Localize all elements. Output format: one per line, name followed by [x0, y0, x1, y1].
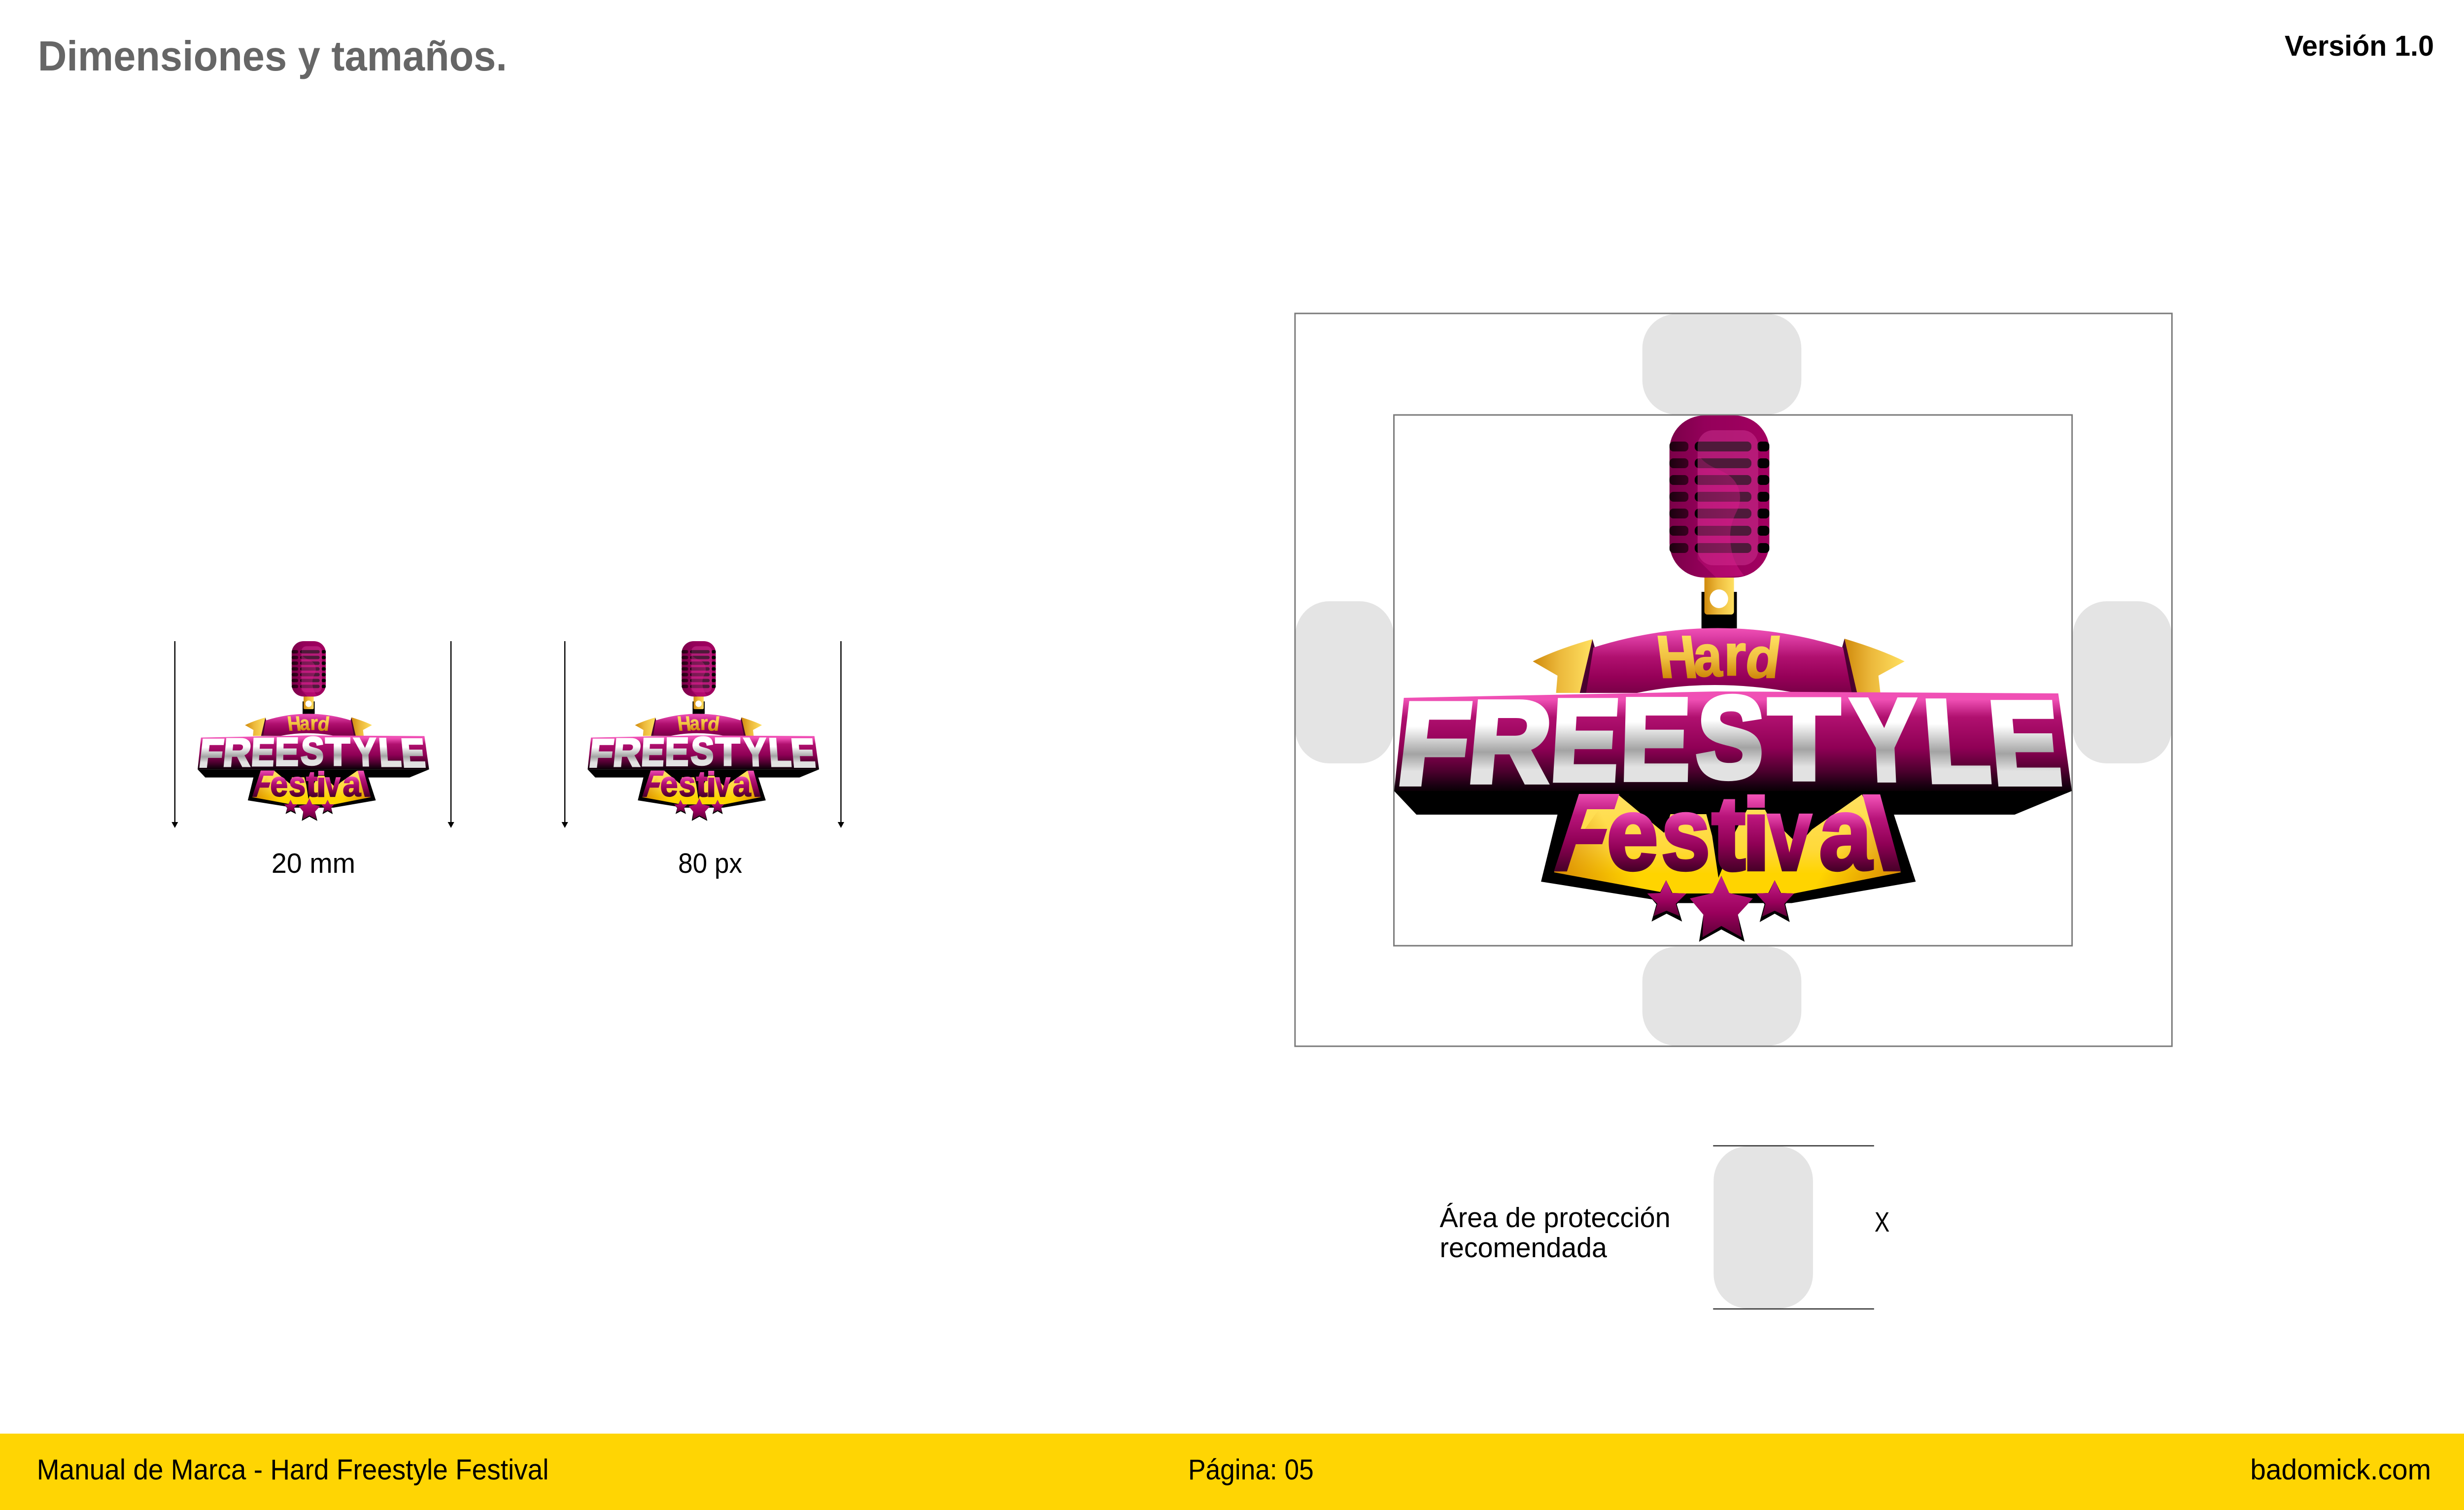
wordmark Festival: v — [1768, 776, 1812, 892]
small logo: E — [640, 730, 666, 774]
small logo: e — [660, 764, 678, 804]
panel: protection area diagram — [1295, 313, 2172, 1046]
footer bar — [0, 1434, 2464, 1510]
small logo: Y — [353, 730, 377, 774]
small logo: e — [270, 764, 288, 804]
small logo: a — [689, 712, 700, 735]
small logo: d — [707, 714, 721, 735]
wordmark FREESTYLE: Y — [1849, 676, 1920, 804]
small logo: R — [611, 730, 643, 775]
panel: small logo 80 px — [562, 641, 844, 879]
small logo: v — [325, 764, 341, 804]
wordmark FREESTYLE: E — [1547, 676, 1623, 804]
small logo: E — [664, 730, 689, 774]
legend text: Área de protección — [1440, 1202, 1671, 1233]
wordmark FREESTYLE: L — [1919, 676, 1994, 806]
small logo: s — [289, 765, 306, 804]
protection pad right — [2073, 601, 2172, 763]
small logo: r — [310, 712, 318, 734]
small logo: d — [316, 714, 331, 735]
yellow Festival banner — [1554, 794, 1901, 893]
legend top rule — [1713, 1145, 1874, 1146]
legend: recommended protection area — [1440, 1146, 1889, 1309]
right dimension arrow — [838, 641, 844, 828]
wordmark Festival: F — [1543, 773, 1628, 893]
wordmark Festival: l — [1852, 778, 1913, 892]
wordmark FREESTYLE: E — [1984, 678, 2066, 809]
wordmark FREESTYLE: F — [1392, 679, 1476, 808]
size label 20 mm: 20 mm — [272, 848, 355, 879]
small logo: H — [286, 713, 303, 735]
legend X label: X — [1875, 1206, 1889, 1237]
protection pad top — [1643, 314, 1801, 414]
footer manual title: Manual de Marca - Hard Freestyle Festival — [37, 1454, 549, 1486]
small logo: r — [700, 712, 708, 734]
small logo: E — [250, 730, 276, 774]
footer website: badomick.com — [2250, 1454, 2431, 1486]
small logo: H — [676, 713, 692, 735]
small logo: a — [342, 764, 361, 804]
wordmark Festival: e — [1607, 776, 1658, 892]
small logo — [197, 641, 429, 821]
small logo — [587, 641, 819, 821]
legend grey pad — [1713, 1146, 1813, 1308]
right dimension arrow — [448, 641, 454, 828]
wordmark Festival: t — [1711, 774, 1745, 892]
wordmark Festival: a — [1819, 776, 1873, 892]
wordmark FREESTYLE: E — [1619, 676, 1692, 804]
icon: microphone — [1670, 415, 1769, 628]
left dimension arrow — [562, 641, 568, 828]
small logo: T — [716, 730, 740, 774]
ribbon: Hard: r — [1724, 622, 1746, 687]
small logo: F — [248, 764, 277, 805]
ribbon: Hard: a — [1692, 623, 1724, 689]
title: Dimensiones y tamaños. — [38, 33, 507, 79]
small logo: Y — [743, 730, 767, 774]
small logo: S — [300, 729, 325, 773]
wordmark FREESTYLE: S — [1694, 673, 1766, 802]
version label: Versión 1.0 — [2285, 31, 2434, 62]
small logo: F — [638, 764, 667, 805]
small logo: v — [715, 764, 730, 804]
small logo: E — [274, 730, 299, 774]
small logo: F — [197, 731, 226, 775]
wordmark FREESTYLE: T — [1769, 675, 1840, 803]
small logo: s — [679, 765, 696, 804]
small logo: L — [377, 731, 403, 775]
small logo: F — [587, 731, 616, 775]
icon: three stars — [1647, 876, 1794, 942]
small logo: a — [733, 764, 751, 804]
wordmark Festival: i — [1742, 778, 1771, 892]
black extrusion and Festival backing — [1394, 791, 2072, 903]
ribbon: Hard — [1533, 622, 1905, 693]
size label 80 px: 80 px — [678, 848, 742, 879]
legend text — [1440, 1202, 1671, 1263]
outer protection frame — [1295, 313, 2172, 1046]
left dimension arrow — [171, 641, 178, 828]
legend text: recomendada — [1440, 1232, 1607, 1263]
large logo — [1392, 415, 2072, 942]
ribbon: Hard: d — [1742, 626, 1784, 690]
small logo: i — [316, 765, 326, 804]
small logo: l — [354, 765, 375, 804]
inner logo frame — [1394, 415, 2072, 946]
wordmark FREESTYLE — [1392, 673, 2066, 809]
protection pad left — [1295, 601, 1394, 763]
small logo: t — [306, 764, 318, 804]
small logo: l — [744, 765, 765, 804]
protection pad bottom — [1643, 947, 1801, 1046]
FREESTYLE banner — [1394, 691, 2072, 791]
legend bottom rule — [1713, 1308, 1874, 1309]
small logo: R — [221, 730, 253, 775]
small logo: S — [690, 729, 715, 773]
wordmark FREESTYLE: R — [1463, 678, 1557, 806]
ribbon: Hard: H — [1653, 623, 1701, 690]
panel: small logo 20 mm — [171, 641, 454, 879]
small logo: L — [767, 731, 792, 775]
wordmark Festival: s — [1661, 776, 1711, 892]
small logo: t — [696, 764, 708, 804]
small logo: a — [300, 712, 310, 735]
wordmark Festival — [1543, 773, 1913, 893]
small logo: E — [399, 731, 427, 776]
small logo: E — [789, 731, 817, 776]
footer page number: Página: 05 — [1188, 1454, 1314, 1486]
small logo: T — [325, 730, 350, 774]
small logo: i — [706, 765, 716, 804]
